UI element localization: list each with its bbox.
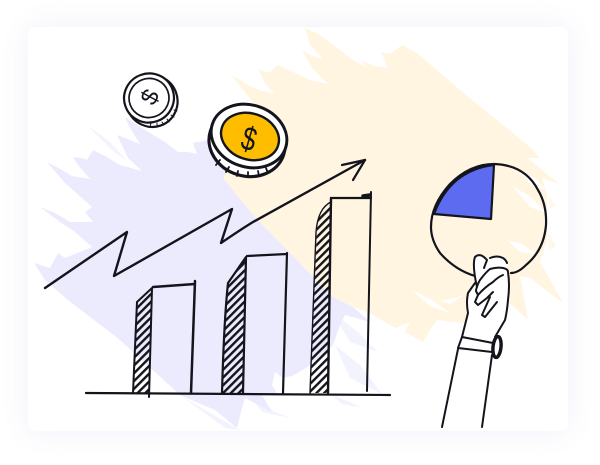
icon: watch (492, 336, 502, 358)
illustration (34, 28, 563, 430)
icon: gold coin (200, 95, 295, 186)
bar 1 (130, 281, 195, 397)
yellow brush stroke (223, 28, 563, 342)
bar 3 (308, 192, 371, 396)
icon: small coin (117, 66, 185, 134)
hand holding the pie chart (442, 255, 509, 427)
pie outline (431, 164, 546, 276)
blue sector (434, 165, 494, 219)
icon: small coin: $ (135, 85, 165, 109)
cuff (458, 337, 493, 352)
arm (442, 349, 492, 427)
panel: white card background (28, 27, 568, 431)
baseline (86, 393, 390, 395)
bar 2 (220, 253, 287, 396)
icon: gold coin: $ (237, 120, 261, 159)
pie chart (431, 164, 546, 276)
white streaks (412, 172, 547, 313)
trend arrow (45, 160, 365, 288)
bar chart (86, 192, 390, 397)
hand (462, 255, 509, 343)
purple brush stroke (34, 117, 382, 430)
